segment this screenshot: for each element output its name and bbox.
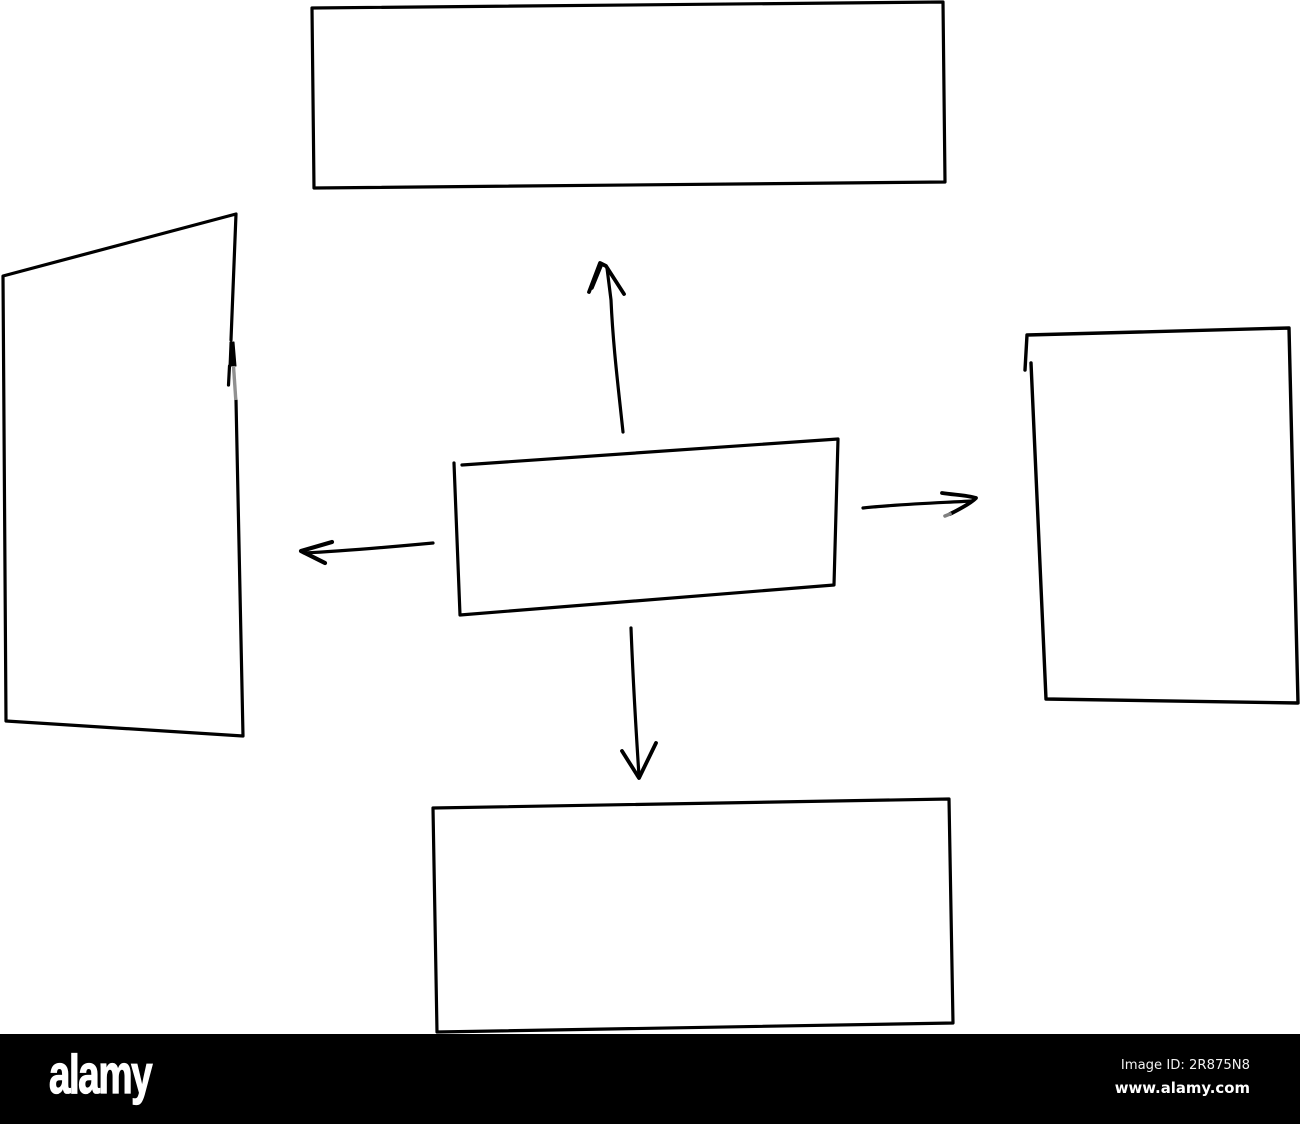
watermark bar (0, 1034, 1300, 1124)
arrow: up (589, 263, 624, 432)
panel: left box (3, 214, 243, 736)
stock url: www.alamy.com (1115, 1079, 1250, 1097)
arrow: down (622, 628, 656, 778)
arrow: left (301, 542, 433, 563)
panel: bottom box (433, 799, 953, 1032)
image id: Image ID: 2R875N8 (1121, 1058, 1250, 1073)
panel: top box (312, 2, 945, 188)
panel: center box (454, 439, 838, 615)
panel: right box (1025, 328, 1298, 703)
logo text: alamy (49, 1043, 151, 1105)
arrow: right (863, 493, 976, 516)
